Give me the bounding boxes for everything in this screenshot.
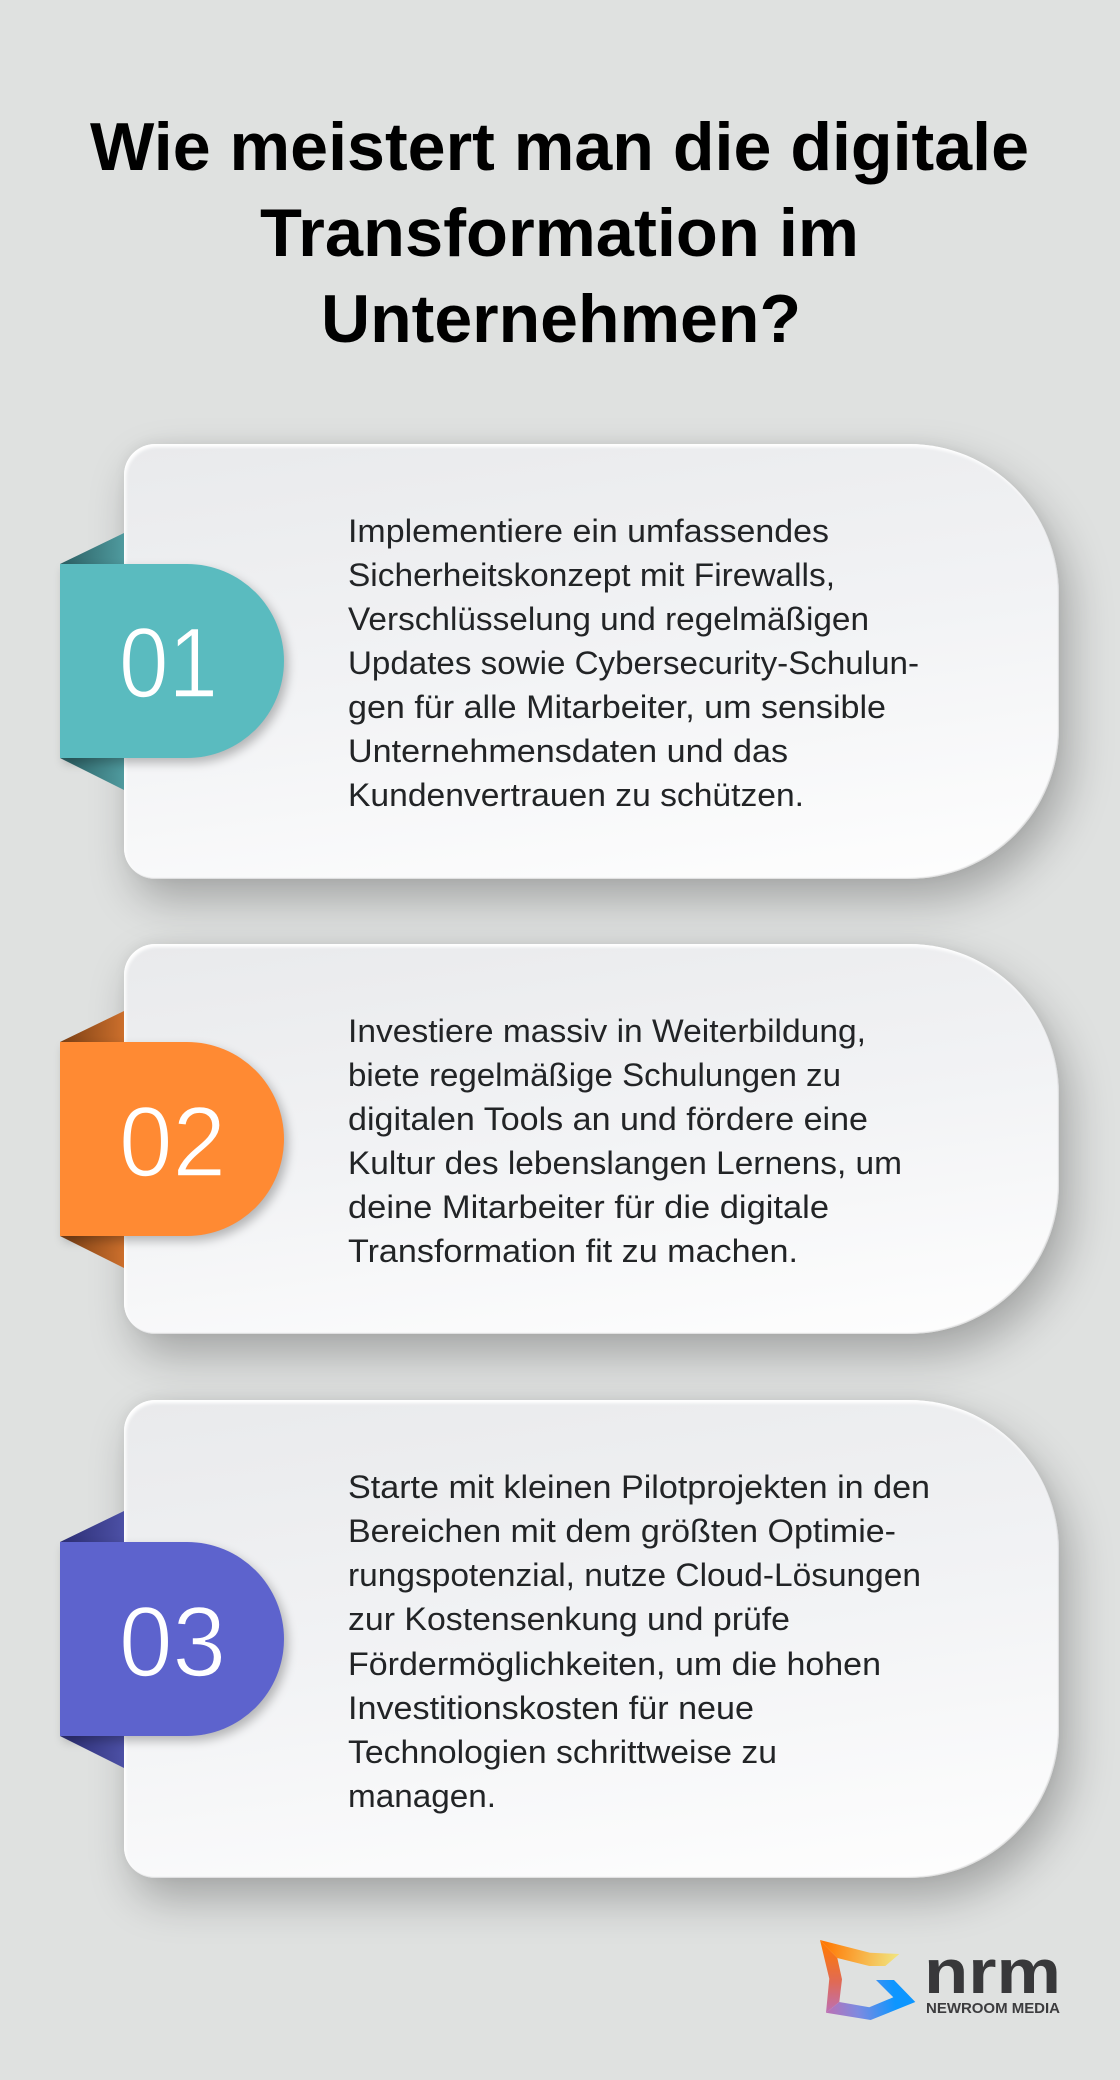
title: Wie meistert man die digitale bbox=[90, 109, 1029, 185]
text: step 02 body: Investiere massiv in Weiterbildung, bbox=[348, 1013, 866, 1049]
icon: purple ribbon fold bbox=[60, 1511, 124, 1768]
icon: logo mark bbox=[820, 1940, 915, 2020]
title: Transformation im bbox=[260, 195, 859, 271]
text: step 02 body: deine Mitarbeiter für die digitale bbox=[348, 1189, 829, 1225]
text: step 01 body: Kundenvertrauen zu schützen. bbox=[348, 777, 804, 813]
card: step 03 background bbox=[124, 1400, 1059, 1878]
text: step 01 body: gen für alle Mitarbeiter, um sensible bbox=[348, 689, 886, 725]
text: step 03 body: managen. bbox=[348, 1778, 496, 1814]
text: step 02 body: Transformation fit zu machen. bbox=[348, 1233, 798, 1269]
text: nrm wordmark: nrm bbox=[924, 1938, 1061, 2007]
text: Newroom Media: NEWROOM MEDIA bbox=[926, 2000, 1060, 2017]
panel: step 02 bbox=[59, 936, 1092, 1377]
text: step 01 body: Verschlüsselung und regelmäßigen bbox=[348, 601, 869, 637]
text: step 03 body: Fördermöglichkeiten, um die hohen bbox=[348, 1646, 881, 1682]
text: step 03 body bbox=[348, 1469, 930, 1814]
badge: 03 bbox=[60, 1542, 284, 1736]
text: step 01 body: Sicherheitskonzept mit Firewalls, bbox=[348, 557, 835, 593]
text: step 03 body: Investitionskosten für neue bbox=[348, 1690, 754, 1726]
title: Unternehmen? bbox=[321, 281, 801, 357]
text: step 03 body: Starte mit kleinen Pilotprojekten in den bbox=[348, 1469, 930, 1505]
text: step 02 body: biete regelmäßige Schulungen zu bbox=[348, 1057, 841, 1093]
card: step 02 background bbox=[124, 944, 1059, 1334]
panel: step 01 bbox=[59, 436, 1092, 922]
text: step 01 body bbox=[348, 513, 919, 813]
badge: 01 bbox=[60, 564, 284, 758]
text: step 01 body: Updates sowie Cybersecurity-Schulun- bbox=[348, 645, 919, 681]
text: step 03 body: Technologien schrittweise zu bbox=[348, 1734, 777, 1770]
text: step 02 body bbox=[348, 1013, 902, 1269]
text: step 03 body: rungspotenzial, nutze Cloud-Lösungen bbox=[348, 1557, 921, 1593]
icon: orange ribbon fold bbox=[60, 1011, 124, 1268]
text: step 03 body: Bereichen mit dem größten Optimie- bbox=[348, 1513, 896, 1549]
badge: 01: 01 bbox=[119, 607, 218, 718]
badge: 03: 03 bbox=[119, 1586, 226, 1697]
badge: 02 bbox=[60, 1042, 284, 1236]
text: step 02 body: Kultur des lebenslangen Lernens, um bbox=[348, 1145, 902, 1181]
panel: step 03 bbox=[59, 1392, 1092, 1921]
text: step 01 body: Implementiere ein umfassendes bbox=[348, 513, 829, 549]
title bbox=[90, 109, 1029, 357]
text: step 01 body: Unternehmensdaten und das bbox=[348, 733, 788, 769]
card: step 01 background bbox=[124, 444, 1059, 879]
icon: teal ribbon fold bbox=[60, 533, 124, 790]
badge: 02: 02 bbox=[119, 1086, 226, 1197]
text: step 03 body: zur Kostensenkung und prüfe bbox=[348, 1601, 790, 1637]
text: step 02 body: digitalen Tools an und fördere eine bbox=[348, 1101, 868, 1137]
